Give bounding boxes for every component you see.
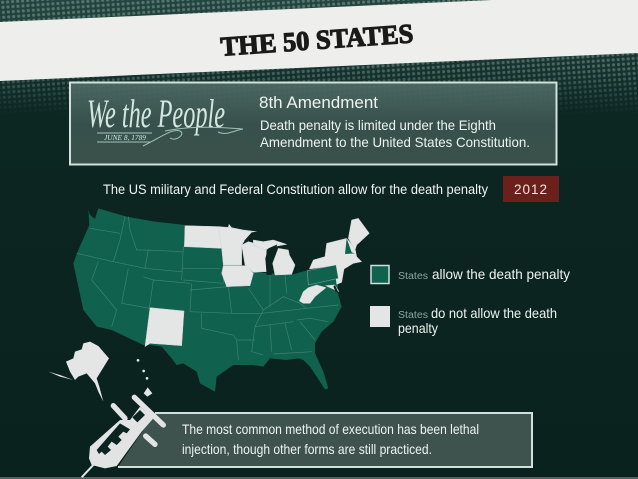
text: injection description: The most common method of execution has been lethal xyxy=(182,421,479,437)
legend: do not allow: States xyxy=(398,310,428,321)
title banner xyxy=(0,0,638,81)
text: amendment description: Amendment to the United States Constitution. xyxy=(260,134,530,150)
text: injection description: injection, though other forms are still practiced. xyxy=(182,441,432,457)
title: THE 50 STATES xyxy=(220,18,414,62)
map: united states xyxy=(73,208,369,392)
legend xyxy=(370,266,570,336)
icon: syringe xyxy=(82,397,163,477)
text: amendment description: Death penalty is limited under the Eighth xyxy=(260,117,496,133)
legend: allow: allow the death penalty xyxy=(432,266,570,282)
pennsylvania xyxy=(307,265,338,285)
hawaii xyxy=(137,359,152,397)
new hampshire xyxy=(345,238,355,254)
text: injection description xyxy=(182,421,479,457)
text: amendment description xyxy=(260,117,530,150)
state borders xyxy=(77,217,338,360)
legend: do not allow xyxy=(370,305,557,336)
alaska xyxy=(66,342,109,402)
text: military and constitution statement: The US military and Federal Constitution allow for the death penalty xyxy=(103,182,488,197)
legend: do not allow: penalty xyxy=(398,320,438,336)
map: alaska and hawaii xyxy=(48,342,152,402)
year badge: 2012 xyxy=(514,182,548,197)
callout: lethal injection xyxy=(118,413,532,467)
panel: 8th amendment xyxy=(70,82,556,164)
great lakes xyxy=(244,231,338,292)
year badge xyxy=(503,176,559,202)
contiguous states allowing the death penalty xyxy=(73,208,342,392)
icon: we the people script: We the People xyxy=(87,91,225,136)
legend: allow: States xyxy=(398,271,428,282)
legend: do not allow: do not allow the death xyxy=(431,305,557,321)
icon: we the people script xyxy=(87,91,243,146)
heading: 8th amendment: 8th Amendment xyxy=(259,93,378,112)
icon: we the people script: JUNE 8, 1789 xyxy=(104,134,147,142)
legend: allow xyxy=(371,266,570,284)
states without the death penalty xyxy=(145,218,369,347)
